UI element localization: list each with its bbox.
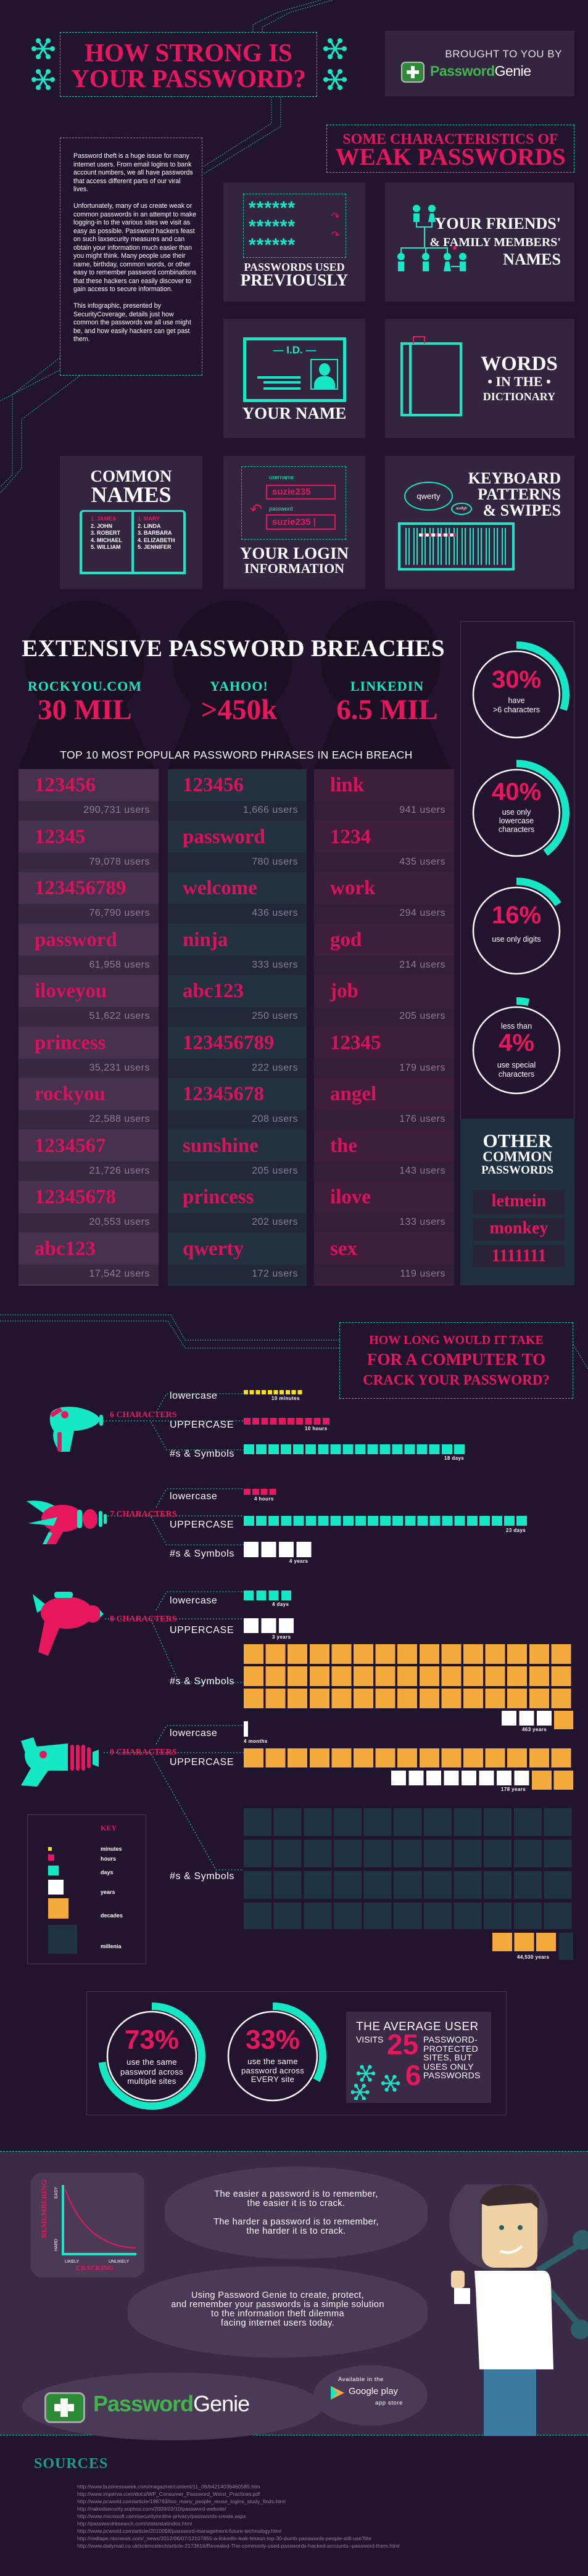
column 3 linkedin: the <box>330 1135 357 1157</box>
column 2 yahoo: 123456 <box>183 774 244 796</box>
chart: 73% and 33% circles <box>99 2002 326 2110</box>
subheading: top 10: TOP 10 MOST POPULAR PASSWORD PHRASES IN EACH BREACH <box>60 749 413 761</box>
column 1 rockyou: 123456789 <box>35 877 126 899</box>
column 1 rockyou: abc123 <box>35 1237 96 1259</box>
column 1 rockyou: 12345678 <box>35 1186 116 1208</box>
legend: key: KEY <box>101 1824 117 1832</box>
text: UPPERCASE <box>170 1520 234 1530</box>
speech bubble: password genie solution: Using Password Genie to create, protect, <box>191 2290 364 2300</box>
column 2 yahoo: qwerty <box>183 1237 244 1259</box>
icon: open book with names <box>80 510 186 574</box>
column 2 yahoo: 436 users <box>252 908 298 918</box>
speech bubble: easier/harder: The harder a password is to remember, <box>213 2217 379 2227</box>
column 1 rockyou: 61,958 users <box>89 960 150 969</box>
icon: ray gun 8 characters <box>33 1592 104 1656</box>
panel: bottom message section <box>0 2151 588 2435</box>
panel: your login information: YOUR LOGIN <box>240 544 349 562</box>
panel: reuse stats: EVERY site <box>251 2075 294 2084</box>
panel: reuse stats <box>86 1991 507 2115</box>
column 2 yahoo: 12345678 <box>183 1083 264 1105</box>
column 1 rockyou: 79,078 users <box>89 856 150 867</box>
column 3 linkedin <box>329 774 445 1279</box>
speech bubble: password genie solution: and remember your passwords is a simple solution <box>171 2300 384 2310</box>
icon: asterisk rows <box>243 194 346 258</box>
panel: your login information: INFORMATION <box>244 561 344 576</box>
chart: remembering vs cracking: UNLIKELY <box>109 2260 130 2264</box>
bars: 7 characters: 4 years <box>289 1558 308 1564</box>
panel: average user: PASSWORDS <box>423 2070 481 2080</box>
speech bubble: password genie solution: facing internet users today. <box>221 2318 334 2328</box>
connector lines for crack chart <box>103 1393 244 1870</box>
column 1 rockyou: 35,231 users <box>89 1062 150 1073</box>
column 3 linkedin: sex <box>330 1237 357 1259</box>
column 2 yahoo: abc123 <box>183 980 244 1002</box>
panel: average user: PASSWORD- <box>423 2035 478 2044</box>
column 3 linkedin: 294 users <box>399 908 445 918</box>
text: UPPERCASE <box>170 1625 234 1636</box>
column 3 linkedin: 12345 <box>330 1031 381 1053</box>
legend: key: minutes <box>101 1846 122 1852</box>
panel: friends and family names: NAMES <box>503 250 561 268</box>
text: #s & Symbols <box>170 1871 234 1882</box>
icon: asterisk rows: ↷ <box>331 230 339 241</box>
column 1 rockyou: 17,542 users <box>89 1268 150 1279</box>
text block: source urls <box>77 2483 400 2549</box>
column 3 linkedin: 1234 <box>330 825 371 847</box>
bars: 9 characters: 4 months <box>244 1739 268 1744</box>
icon: speech bubbles and keyboard <box>398 482 515 570</box>
column 3 linkedin: 179 users <box>399 1062 445 1073</box>
panel: sidebar stats circles <box>460 621 574 1285</box>
column 2 yahoo: 250 users <box>252 1011 298 1021</box>
column 1 rockyou: 22,588 users <box>89 1114 150 1124</box>
column 3 linkedin: work <box>330 877 375 899</box>
column 3 linkedin: 205 users <box>399 1011 445 1021</box>
bars: 9 characters: 178 years <box>501 1787 526 1792</box>
text block: intro <box>60 138 202 376</box>
panel: sidebar stats circles: use special <box>497 1061 536 1069</box>
panel: sidebar stats circles: use only <box>502 808 531 817</box>
panel: other common passwords: COMMON <box>482 1149 552 1164</box>
speech bubble: easier/harder: The easier a password is to remember, <box>214 2189 378 2199</box>
legend: key: days <box>101 1869 114 1875</box>
heading: extensive password breaches: EXTENSIVE PASSWORD BREACHES <box>22 635 445 662</box>
bars: 8 characters: 3 years <box>272 1634 291 1640</box>
text: #s & Symbols <box>170 1549 234 1559</box>
panel: reuse stats: password across <box>241 2066 304 2075</box>
icon: open book with names: 2. JOHN <box>91 523 112 529</box>
heading: how long to crack: FOR A COMPUTER TO <box>367 1350 545 1368</box>
column 3 linkedin: job <box>330 980 358 1002</box>
legend: key: decades <box>101 1912 123 1919</box>
panel: sidebar stats circles: lowercase <box>499 817 534 825</box>
decorative dotted line to crack heading <box>0 1315 588 1369</box>
column 3 linkedin: 119 users <box>400 1268 445 1279</box>
column 2 yahoo: princess <box>183 1186 254 1208</box>
panel: common names: COMMON <box>91 467 172 485</box>
panel: words in the dictionary: • IN THE • <box>487 374 551 389</box>
panel: sidebar stats circles: 16% <box>492 902 541 929</box>
column 3 linkedin: angel <box>330 1083 376 1105</box>
icon: asterisk rows: ↷ <box>331 212 339 222</box>
text block: intro: Password theft is a huge issue for many internet users. From email logins to bank account numbers, we all have passwords that access different parts of our viral lives. <box>73 152 193 193</box>
panel: your login information <box>223 456 365 589</box>
panel: average user <box>346 2012 491 2103</box>
panel: your name <box>223 319 365 438</box>
breach stats: rockyou, yahoo, linkedin: 30 MIL <box>38 694 132 726</box>
panel: sidebar stats circles: characters <box>499 825 534 834</box>
text: lowercase <box>170 1728 217 1739</box>
text block: source urls: http://www.dailymail.co.uk/sciencetech/article-2173616/Revealed-The-commonly-used-passwords-hacked-accounts--password-them.html <box>77 2543 400 2549</box>
icon: ray gun 6 characters <box>49 1407 103 1452</box>
icon: speech bubbles and keyboard: qwerty <box>416 492 441 501</box>
column 2 yahoo: welcome <box>183 877 257 899</box>
bars: 6 characters: 10 hours <box>305 1426 328 1431</box>
label: 9 characters: 9 CHARACTERS <box>110 1748 177 1757</box>
column 3 linkedin: link <box>330 774 364 796</box>
column 1 rockyou: 76,790 users <box>89 908 150 918</box>
panel: other common passwords: PASSWORDS <box>481 1164 553 1177</box>
bars: 8 characters: 463 years <box>522 1727 547 1732</box>
column 1 rockyou: 12345 <box>35 825 85 847</box>
panel: words in the dictionary: WORDS <box>481 353 558 375</box>
text block: source urls: http://www.pcworld.com/article/188763/too_many_people_reuse_logins_study_finds.html <box>77 2498 286 2504</box>
panel: other common passwords: 1111111 <box>492 1246 546 1265</box>
breach stats: rockyou, yahoo, linkedin: YAHOO! <box>210 678 268 694</box>
column 2 yahoo: sunshine <box>183 1135 259 1157</box>
speech bubble: password genie solution <box>128 2266 428 2358</box>
column backgrounds (ribbons) <box>19 769 454 1286</box>
text block: source urls: http://www.pcworld.com/article/2010058/password-management-future-technology.html <box>77 2528 281 2534</box>
icon: open book with names: 5. WILLIAM <box>91 544 121 550</box>
column 2 yahoo: 205 users <box>252 1166 298 1175</box>
icon: login form: ↶ <box>250 501 262 518</box>
speech bubble: password genie solution: to the information theft dilemma <box>211 2309 344 2319</box>
panel: average user: THE AVERAGE USER <box>356 2020 479 2033</box>
text block: source urls: http://passwordresearch.com/stats/statindex.html <box>77 2520 192 2527</box>
panel: passwords used previously: PASSWORDS USED <box>244 261 345 273</box>
logo: password genie <box>401 62 531 83</box>
text: UPPERCASE <box>170 1420 234 1430</box>
column 3 linkedin: 133 users <box>399 1217 445 1227</box>
column 1 rockyou: 290,731 users <box>83 805 150 815</box>
title box: HOW STRONG IS <box>85 38 292 67</box>
column 3 linkedin: 176 users <box>399 1114 445 1124</box>
title box: YOUR PASSWORD? <box>71 64 306 93</box>
badge: google play: app store <box>375 2400 403 2406</box>
panel: reuse stats: 73% <box>125 2025 179 2055</box>
panel: reuse stats: use the same <box>247 2057 298 2066</box>
panel: sidebar stats circles: 4% <box>499 1029 534 1056</box>
panel: sidebar stats circles: less than <box>501 1022 532 1031</box>
bars: 7 characters: 23 days <box>506 1528 526 1533</box>
heading: weak passwords: WEAK PASSWORDS <box>335 144 566 170</box>
logo bubble: password genie <box>22 2372 323 2440</box>
bars: 9 characters: 44,530 years <box>517 1954 549 1960</box>
column 1 rockyou: rockyou <box>35 1083 106 1105</box>
breach stats: rockyou, yahoo, linkedin <box>28 678 438 726</box>
logo bubble: password genie: PasswordGenie <box>93 2391 249 2416</box>
column 1 rockyou: 51,622 users <box>89 1011 150 1021</box>
bars: 6 characters <box>244 1390 465 1461</box>
heading: how long to crack: HOW LONG WOULD IT TAKE <box>369 1333 544 1347</box>
column 1 rockyou: 123456 <box>35 774 96 796</box>
icon: open book with names: 1. JAMES <box>91 516 116 522</box>
column 1 rockyou: 21,726 users <box>89 1166 150 1175</box>
icon: ray gun 9 characters <box>21 1737 99 1787</box>
breach stats: rockyou, yahoo, linkedin: LINKEDIN <box>350 678 424 694</box>
icon: snowflake asterisks around title <box>31 38 347 90</box>
column 1 rockyou: 20,553 users <box>89 1217 150 1227</box>
bars: 8 characters: 4 days <box>272 1602 289 1607</box>
badge: google play: Available in the <box>338 2376 384 2383</box>
column 3 linkedin: 214 users <box>399 960 445 969</box>
text: #s & Symbols <box>170 1449 234 1459</box>
heading: weak passwords <box>326 125 574 173</box>
chart: remembering vs cracking: HARD <box>54 2239 59 2251</box>
icon: open book with names: 5. JENNIFER <box>138 544 172 550</box>
column 2 yahoo: ninja <box>183 929 228 951</box>
panel: brought to you by <box>385 31 574 96</box>
column 1 rockyou: iloveyou <box>35 980 107 1002</box>
panel: sidebar stats circles: >6 characters <box>493 706 540 714</box>
panel: passwords used previously <box>223 183 365 302</box>
icon: open book with names: 4. MICHAEL <box>91 537 122 543</box>
icon: ID card: — I.D. — <box>273 344 316 356</box>
text block: source urls: http://www.microsoft.com/security/online-privacy/passwords-create.aspx <box>77 2513 246 2519</box>
panel: average user: PROTECTED <box>423 2044 478 2054</box>
icon: login form: suzie235 | <box>272 517 316 527</box>
icon: open book with names: 1. MARY <box>138 516 160 522</box>
panel: reuse stats: password across <box>120 2067 183 2076</box>
panel: keyboard patterns: KEYBOARD <box>468 469 561 487</box>
column 1 rockyou: princess <box>35 1031 106 1053</box>
icon: login form: username <box>269 474 294 480</box>
panel: average user: 25 <box>387 2028 418 2060</box>
chart: remembering vs cracking: LIKELY <box>65 2260 80 2264</box>
panel: keyboard patterns: & SWIPES <box>483 501 561 519</box>
column 2 yahoo <box>183 774 298 1279</box>
column 1 rockyou: 1234567 <box>35 1135 106 1157</box>
column 2 yahoo: 1,666 users <box>243 805 298 815</box>
icon: login form <box>241 466 346 540</box>
icon: asterisk rows: ****** <box>249 235 296 255</box>
text block: intro: Unfortunately, many of us create weak or common passwords in an attempt to make logging-in to the various sites we visit as easy as possible. Password hackers feast on such laxsecurity measures and can obtain your information much easier than you might think. Many people use their name, birthday, common words, or other easy to remember password combinations that these hackers can easily discover to gain access to secure information. <box>73 202 196 293</box>
text block: source urls: http://www.businessweek.com/magazine/content/11_06/b4214036460585.htm <box>77 2483 260 2490</box>
column 2 yahoo: 333 users <box>252 960 298 969</box>
icon: ray gun 7 characters <box>27 1500 107 1544</box>
panel: sidebar stats circles: characters <box>499 1070 534 1079</box>
column 3 linkedin: 143 users <box>399 1166 445 1175</box>
icon: open book with names: 4. ELIZABETH <box>138 537 175 543</box>
text: lowercase <box>170 1595 217 1606</box>
logo: password genie: PasswordGenie <box>430 63 531 79</box>
icon: login form: password <box>269 506 293 512</box>
bars: 6 characters: 18 days <box>444 1455 464 1461</box>
panel: average user: SITES, BUT <box>423 2052 472 2062</box>
label: 8 characters: 8 CHARACTERS <box>110 1615 177 1624</box>
icon: open book with names: 2. LINDA <box>138 523 161 529</box>
panel: average user: 6 <box>405 2059 421 2091</box>
panel: brought to you by: BROUGHT TO YOU BY <box>445 48 562 60</box>
speech bubble: easier/harder: the harder it is to crack. <box>246 2226 346 2236</box>
breach stats: rockyou, yahoo, linkedin: >450k <box>201 694 277 726</box>
legend: key <box>27 1814 146 1964</box>
panel: words in the dictionary: DICTIONARY <box>483 390 555 403</box>
text block: source urls: http://www.imperva.com/docs/WP_Consumer_Password_Worst_Practices.pdf <box>77 2491 260 2497</box>
legend: key: millenia <box>101 1943 122 1949</box>
panel: other common passwords <box>460 1119 574 1285</box>
panel: sidebar stats circles: have <box>508 696 525 705</box>
text: lowercase <box>170 1491 217 1502</box>
panel: sidebar stats circles: use only digits <box>492 935 541 944</box>
icon: speech bubbles and keyboard: asdfgh <box>456 507 467 511</box>
column 2 yahoo: password <box>183 825 265 847</box>
panel: your name: YOUR NAME <box>242 404 346 422</box>
legend: key: years <box>101 1889 115 1895</box>
bars: 9 characters <box>244 1721 573 1960</box>
bars: 7 characters: 4 hours <box>254 1496 274 1502</box>
panel: friends and family names <box>385 183 574 302</box>
speech bubble: easier/harder: the easier it is to crack. <box>247 2199 345 2208</box>
label: 7 characters: 7 CHARACTERS <box>110 1510 177 1519</box>
icon: ID card <box>243 337 346 402</box>
column 1 rockyou <box>35 774 150 1279</box>
title box <box>60 32 317 97</box>
panel: common names: NAMES <box>91 482 172 507</box>
column 2 yahoo: 202 users <box>252 1217 298 1227</box>
heading: sources: SOURCES <box>34 2456 108 2472</box>
column 2 yahoo: 780 users <box>252 856 298 867</box>
speech bubble: easier/harder <box>165 2167 428 2259</box>
panel: sidebar stats circles: 30% <box>492 666 541 693</box>
column 2 yahoo: 208 users <box>252 1114 298 1124</box>
bars: 8 characters <box>244 1590 573 1732</box>
label: 6 characters: 6 CHARACTERS <box>110 1410 177 1420</box>
panel: reuse stats: multiple sites <box>127 2076 176 2086</box>
panel: friends and family names: YOUR FRIENDS' <box>435 215 561 232</box>
chart: remembering vs cracking: REMEMBERING <box>39 2179 48 2238</box>
chart: remembering vs cracking: EASY <box>54 2187 59 2199</box>
panel: words in the dictionary <box>385 319 574 438</box>
panel: common names <box>60 456 202 589</box>
icon: asterisk rows: ****** <box>249 216 296 237</box>
breach stats: rockyou, yahoo, linkedin: 6.5 MIL <box>336 694 438 726</box>
keyhole backgrounds behind breaches <box>19 601 450 769</box>
bars: 7 characters <box>244 1489 527 1564</box>
icon: book <box>400 342 462 416</box>
legend: key: hours <box>101 1856 116 1862</box>
text block: source urls: http://redtape.nbcnews.com/_news/2012/06/07/12107855-a-linkedin-leak-lesson-top-30-dumb-passwords-people-still-use?lite <box>77 2535 371 2541</box>
icon: family tree <box>397 205 466 271</box>
column 3 linkedin: 941 users <box>399 805 445 815</box>
panel: average user: VISITS <box>356 2035 383 2044</box>
chart: remembering vs cracking: CRACKING <box>76 2265 114 2272</box>
icon: login form: suzie235 <box>272 487 311 497</box>
panel: passwords used previously: PREVIOUSLY <box>241 271 348 289</box>
column 2 yahoo: 222 users <box>252 1062 298 1073</box>
icon: open book with names: 3. ROBERT <box>91 530 120 536</box>
text: lowercase <box>170 1391 217 1401</box>
column 3 linkedin: ilove <box>330 1186 371 1208</box>
panel: other common passwords: letmein <box>492 1191 546 1211</box>
background decoration: dotted circuit lines <box>0 0 332 493</box>
panel: other common passwords: OTHER <box>483 1130 552 1151</box>
panel: keyboard patterns <box>385 456 574 589</box>
panel: friends and family names: & FAMILY MEMBERS' <box>429 236 561 249</box>
heading: how long to crack: CRACK YOUR PASSWORD? <box>363 1372 550 1388</box>
text: #s & Symbols <box>170 1676 234 1687</box>
bars: 6 characters: 10 minutes <box>271 1396 300 1401</box>
panel: sidebar stats circles: 40% <box>492 778 541 805</box>
text block: intro: This infographic, presented by SecurityCoverage, details just how common the passwords we all use might be, and how easily hackers can get past them. <box>73 302 191 343</box>
text block: source urls: http://nakedsecurity.sophos.com/2009/03/10/password-website/ <box>77 2506 226 2512</box>
chart: remembering vs cracking <box>31 2173 144 2278</box>
panel: reuse stats: use the same <box>126 2057 177 2067</box>
icon: asterisk rows: ****** <box>249 198 296 218</box>
badge: google play: Google play <box>349 2386 398 2397</box>
panel: reuse stats: 33% <box>246 2025 300 2055</box>
list: password ribbons <box>19 769 454 1286</box>
column 2 yahoo: 172 users <box>252 1268 298 1279</box>
icon: open book with names: 3. BARBARA <box>138 530 172 536</box>
breach stats: rockyou, yahoo, linkedin: ROCKYOU.COM <box>28 678 142 694</box>
chart: circle percentages <box>473 641 569 1094</box>
panel: other common passwords: monkey <box>490 1219 548 1238</box>
heading: how long to crack <box>339 1322 573 1399</box>
badge: google play <box>313 2365 428 2426</box>
column 1 rockyou: password <box>35 929 117 951</box>
text: UPPERCASE <box>170 1757 234 1767</box>
panel: average user: USES ONLY <box>423 2061 474 2071</box>
column 3 linkedin: 435 users <box>399 856 445 867</box>
illustration: man with thumbs up <box>449 2184 588 2436</box>
heading: weak passwords: SOME CHARACTERISTICS OF <box>342 131 558 147</box>
column 2 yahoo: 123456789 <box>183 1031 274 1053</box>
column 3 linkedin: god <box>330 929 362 951</box>
panel: keyboard patterns: PATTERNS <box>478 485 561 503</box>
